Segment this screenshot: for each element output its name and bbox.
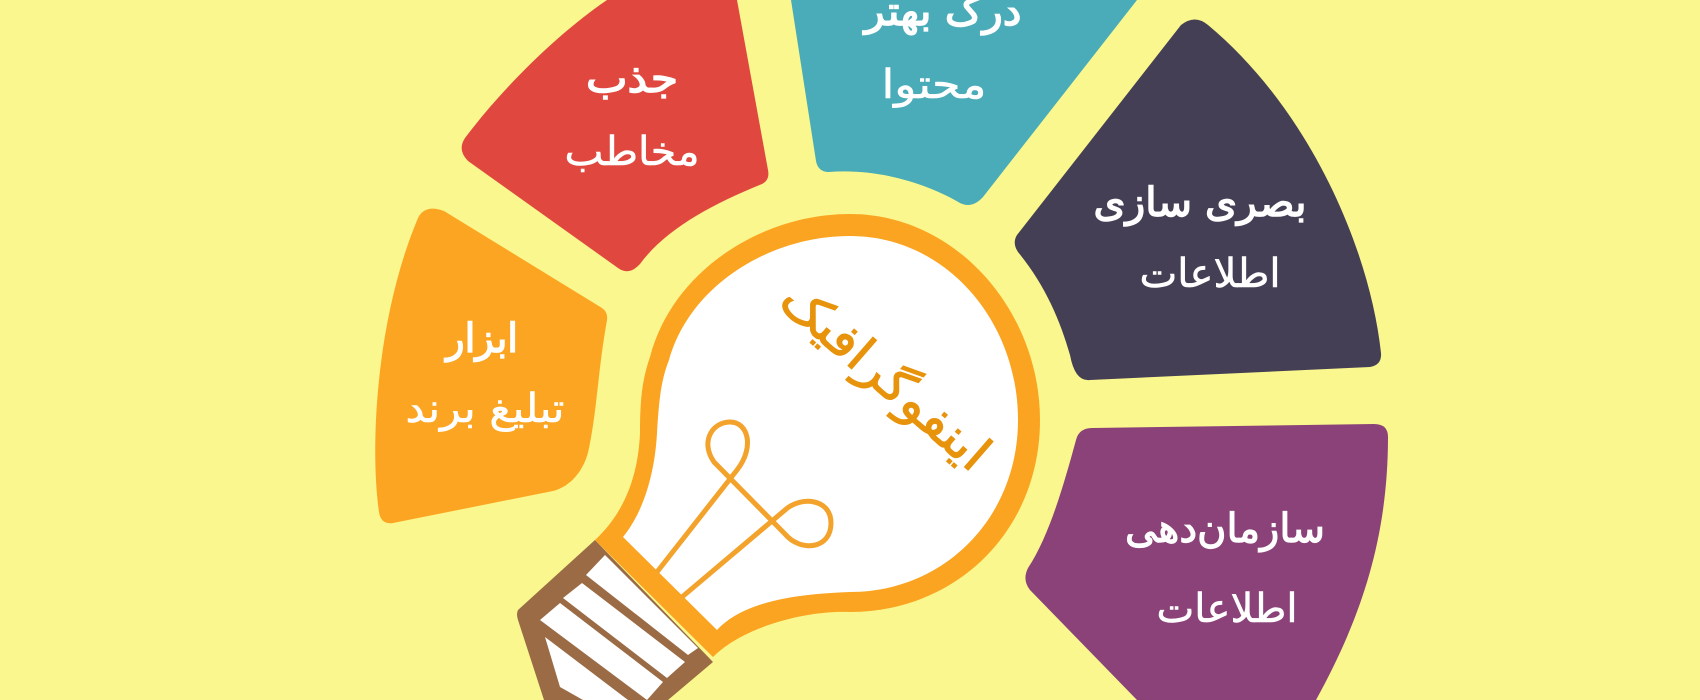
label: organizing: سازمان‌دهی: [1125, 506, 1325, 552]
orange segment: [375, 209, 607, 523]
label: visualization: بصری سازی: [1094, 180, 1306, 226]
bulb base: [517, 540, 713, 700]
label: tool: ابزار: [444, 316, 518, 362]
label: content: محتوا: [882, 62, 986, 108]
label: attract: جذب: [586, 56, 678, 102]
panel: organizing information: [1025, 424, 1388, 700]
panel: better understanding of content: [791, 0, 1137, 205]
panel: attract audience: [462, 0, 768, 271]
title: اینفوگرافیک: [769, 269, 1002, 482]
bulb glass interior: [623, 236, 1018, 630]
label: information: اطلاعات: [1156, 586, 1298, 632]
teal segment: [791, 0, 1137, 205]
label: information: اطلاعات: [1140, 251, 1280, 297]
red segment: [462, 0, 768, 271]
label: brand promotion: تبلیغ برند: [406, 386, 564, 432]
label: audience: مخاطب: [564, 129, 700, 175]
filament: [657, 422, 831, 597]
panel: visualization of information: [1015, 20, 1381, 380]
bulb glass outline: [595, 214, 1040, 657]
icon: light bulb: [517, 214, 1040, 700]
purple segment: [1025, 424, 1388, 700]
panel: tools for brand promotion: [375, 209, 607, 523]
dark segment: [1015, 20, 1381, 380]
